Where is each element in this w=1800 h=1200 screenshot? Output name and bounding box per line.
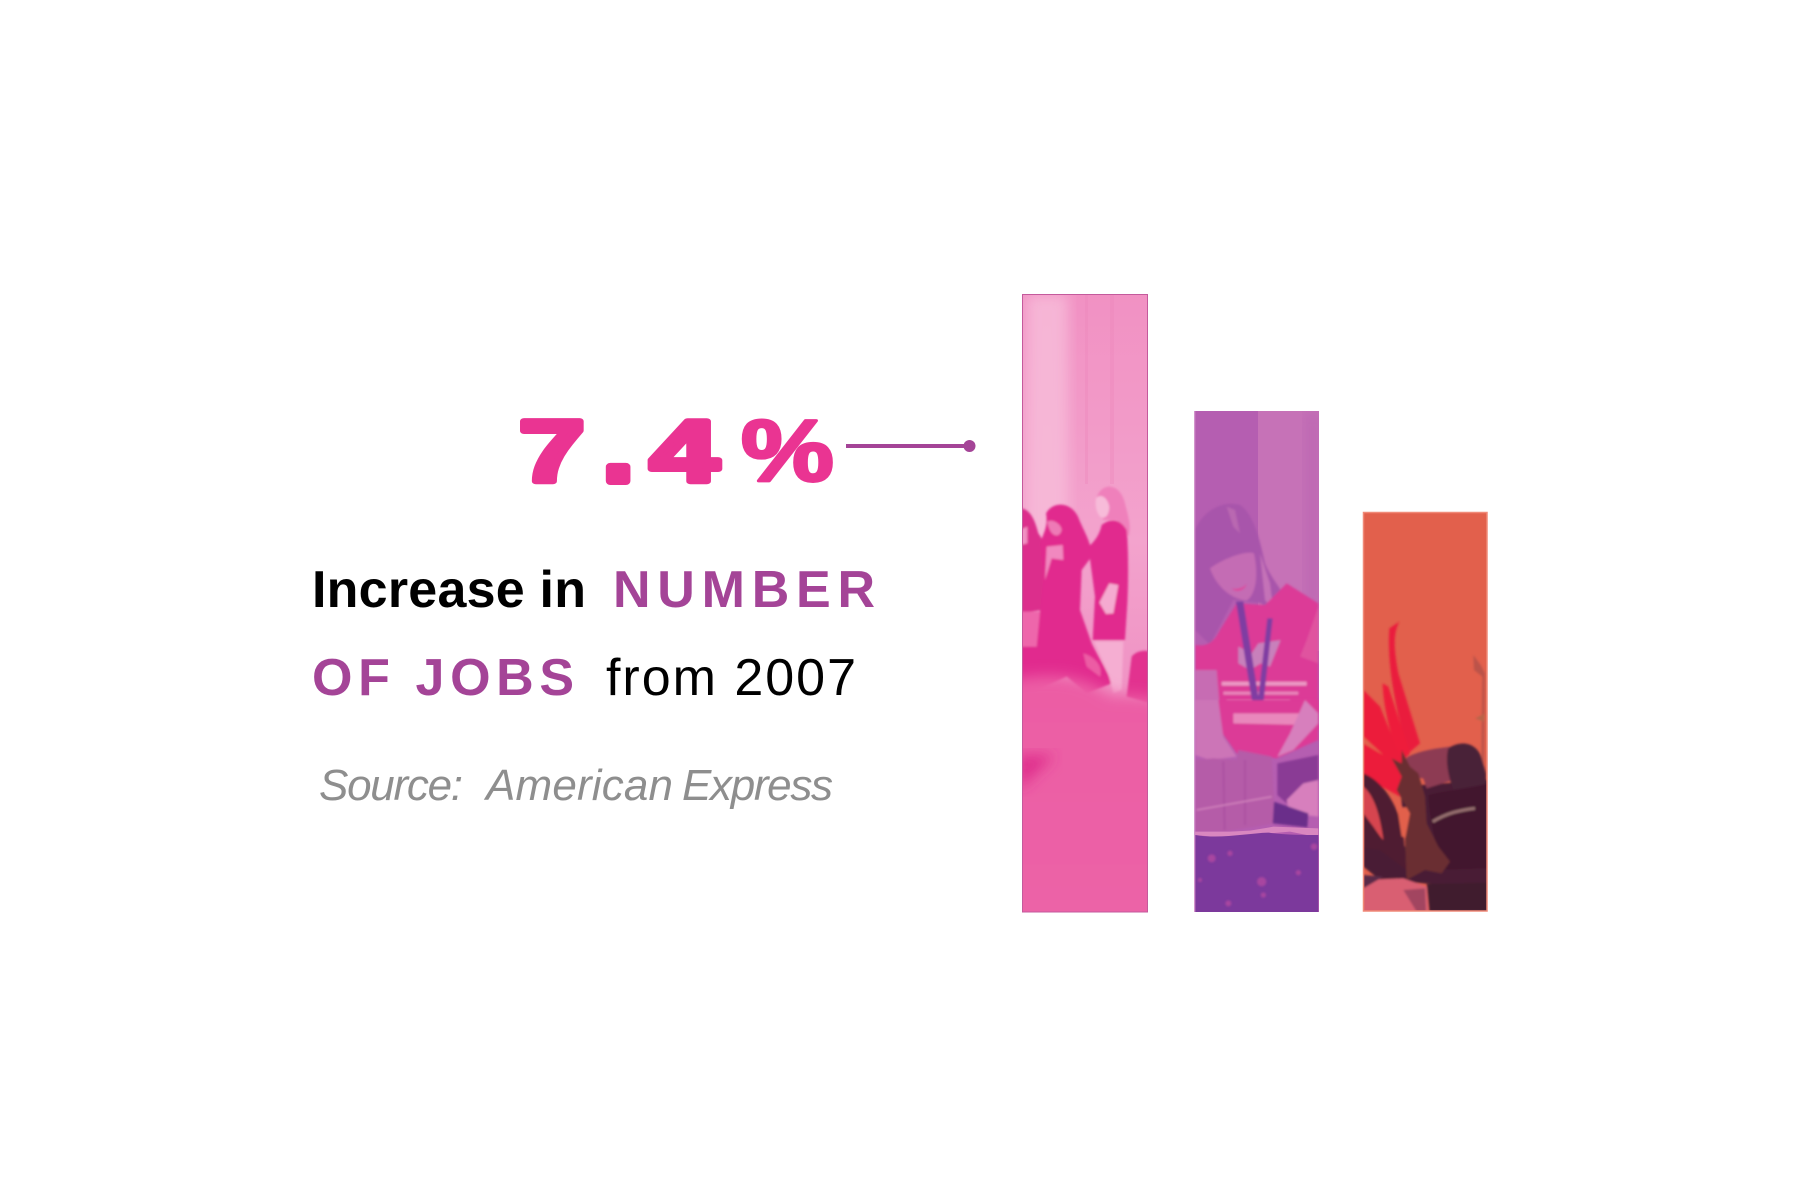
blurred foreground <box>1023 669 1147 912</box>
stat: 7.4% <box>519 395 834 501</box>
stat: 7.4%: . <box>603 395 633 501</box>
fern <box>1392 750 1450 880</box>
table and vase <box>1363 878 1428 912</box>
source note: Express <box>682 761 833 810</box>
line 2: OF JOBS from 2007: OF JOBS <box>312 649 574 707</box>
right woman <box>1096 487 1130 537</box>
lower body and soil <box>1195 700 1318 913</box>
line 1: Increase in NUMBER <box>312 561 875 619</box>
middle woman <box>1020 505 1112 697</box>
bar 3: red photo, flower and ribbon <box>1362 511 1488 912</box>
upper body <box>1195 504 1318 730</box>
description text <box>312 561 875 707</box>
connector line with dot <box>846 440 976 452</box>
stat: 7.4%: 4 <box>650 402 719 500</box>
red petals <box>1389 622 1420 753</box>
right crouching figure <box>1127 651 1150 703</box>
left woman <box>1023 507 1045 613</box>
bar 1: pink photo, women standing <box>1022 294 1148 912</box>
line 1: Increase in NUMBER: NUMBER <box>613 561 875 619</box>
line 2: OF JOBS from 2007: from 2007 <box>606 649 856 707</box>
line 2: OF JOBS from 2007 <box>312 649 856 707</box>
stat: 7.4%: 7 <box>519 403 585 500</box>
line 1: Increase in NUMBER: Increase in <box>312 561 586 619</box>
stat: 7.4%: % <box>741 403 834 500</box>
dark backing <box>1363 780 1488 888</box>
source note: American <box>483 761 673 810</box>
bar 2: purple photo, woman with lanyard <box>1194 411 1320 913</box>
ribbon <box>1403 747 1453 788</box>
source note: Source: <box>319 761 463 810</box>
dark frond <box>1364 772 1406 848</box>
stem at right <box>1473 655 1485 765</box>
